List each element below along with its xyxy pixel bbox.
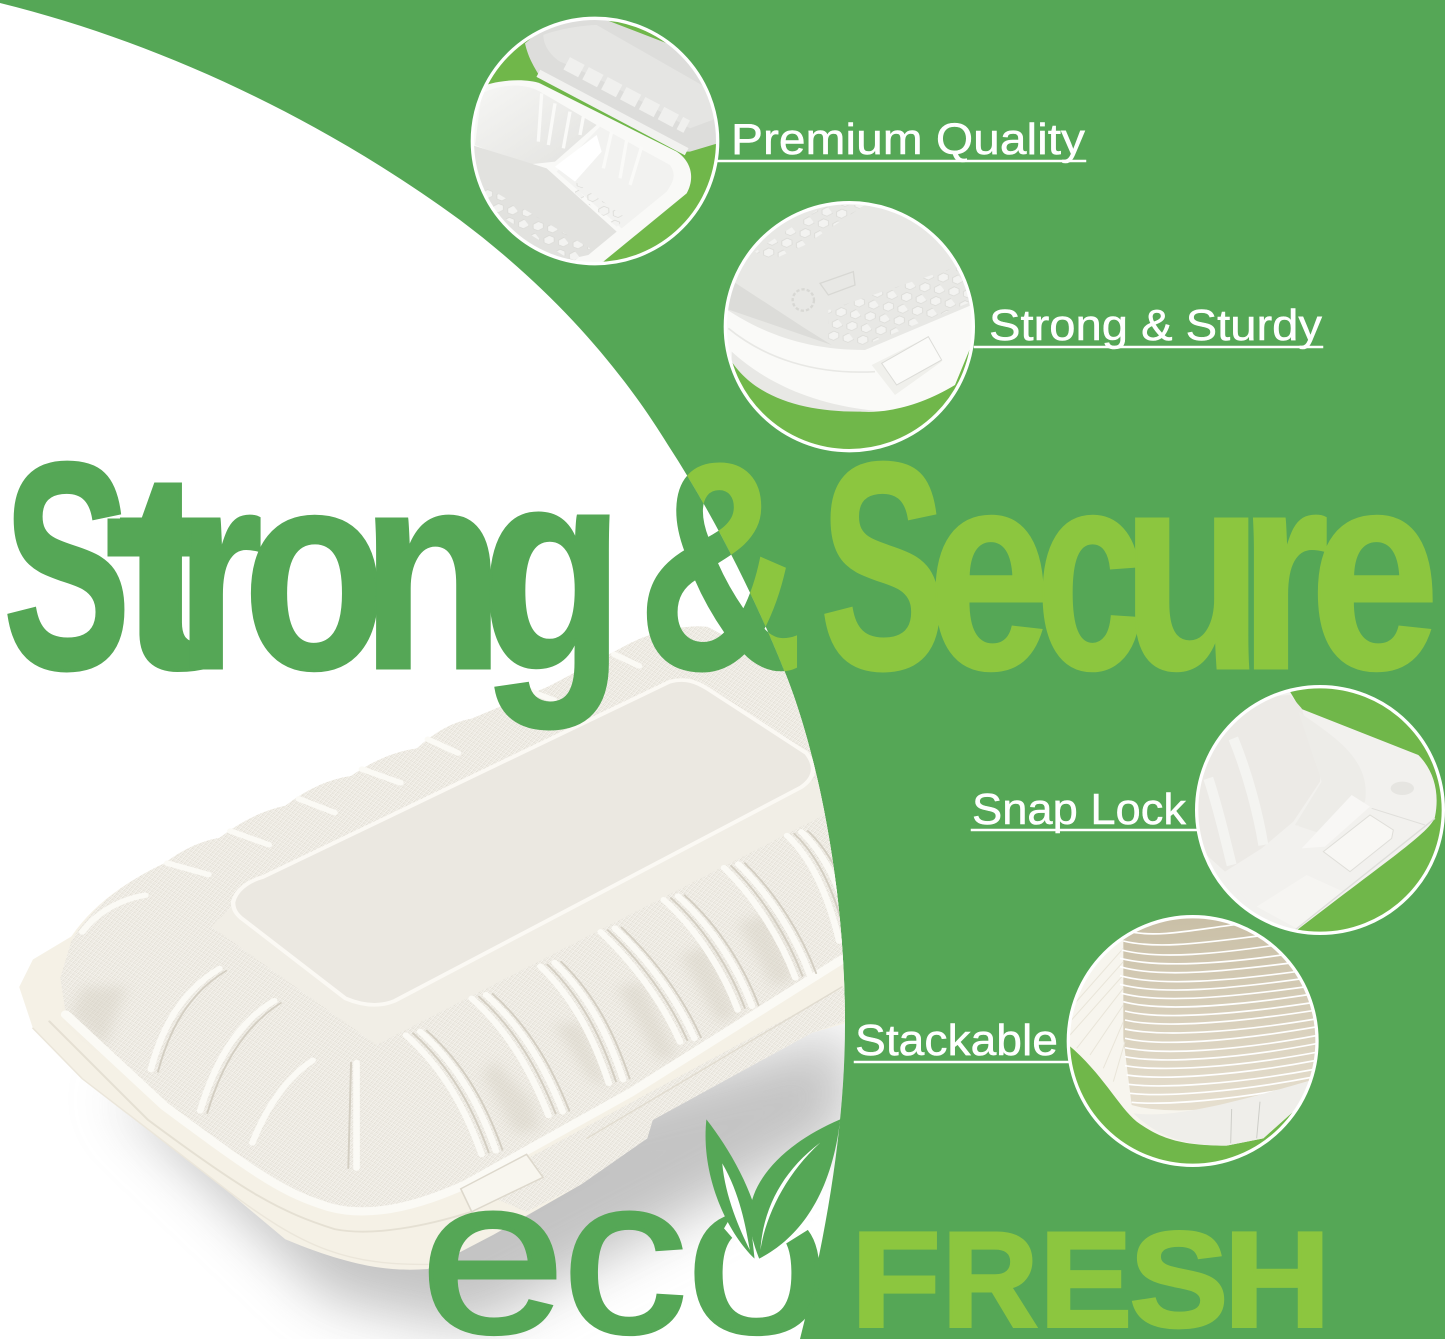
top panel of lid <box>233 680 813 1005</box>
headline: Strong: t <box>118 413 215 728</box>
logo: eco fresh <box>420 1119 1331 1339</box>
logo word: FRESH <box>851 1203 1331 1339</box>
headline: Secure: S <box>820 403 946 731</box>
circle: premium quality detail <box>467 15 723 268</box>
white rim <box>722 305 978 412</box>
dome side shading <box>71 914 795 1134</box>
label: strong & sturdy: Strong & Sturdy <box>989 301 1322 350</box>
headline: Secure: r <box>1239 413 1329 728</box>
headline: Secure: u <box>1122 413 1263 728</box>
circle: strong & sturdy detail <box>715 195 985 451</box>
open lid <box>525 15 723 152</box>
label: snap lock: Snap Lock <box>972 785 1187 834</box>
tray base surface <box>728 204 970 350</box>
stack bottom tray <box>1195 1081 1308 1146</box>
rim lines <box>33 959 842 1264</box>
lid dome <box>60 626 860 1211</box>
label: stackable: Stackable <box>855 1016 1058 1065</box>
headline: Strong: n <box>361 412 504 728</box>
latch tab <box>872 344 942 394</box>
headline: Secure <box>820 403 1439 731</box>
latch tab <box>461 1154 543 1212</box>
stripes <box>1120 923 1323 1103</box>
panel: white curved area <box>0 3 845 1339</box>
circle: stackable detail <box>1060 905 1330 1165</box>
headline: ampersand on white: & <box>638 401 803 731</box>
logo word: eco <box>420 1131 828 1339</box>
smooth band around top panel <box>225 790 834 1024</box>
product: clamshell container <box>19 626 860 1270</box>
logo icon: leaves <box>706 1119 840 1263</box>
headline: Strong & Secure <box>7 460 1433 730</box>
circle: snap lock detail <box>1192 687 1443 933</box>
headline: Secure: e <box>928 413 1050 728</box>
stacked trays <box>1070 940 1291 1146</box>
hole <box>1391 782 1414 795</box>
tray <box>467 80 691 268</box>
headline: ampersand on green: & <box>638 401 803 731</box>
headline: Strong <box>3 401 624 731</box>
corner of tray <box>1192 692 1437 932</box>
latch <box>1323 815 1393 872</box>
honeycomb <box>828 265 972 345</box>
headline: Strong: g <box>481 408 624 731</box>
product shadow <box>110 1030 850 1330</box>
headline: Strong: S <box>3 401 131 731</box>
container silhouette <box>19 626 860 1270</box>
headline: Strong: o <box>243 412 386 728</box>
left face stripes <box>1070 948 1125 1082</box>
label: premium quality: Premium Quality <box>731 115 1085 164</box>
headline: Secure: e <box>1310 413 1439 728</box>
headline: Strong: r <box>175 414 263 729</box>
hinge flange <box>472 987 845 1212</box>
headline: Secure: c <box>1036 414 1144 729</box>
ribs <box>82 654 860 1168</box>
underside texture <box>732 352 878 412</box>
